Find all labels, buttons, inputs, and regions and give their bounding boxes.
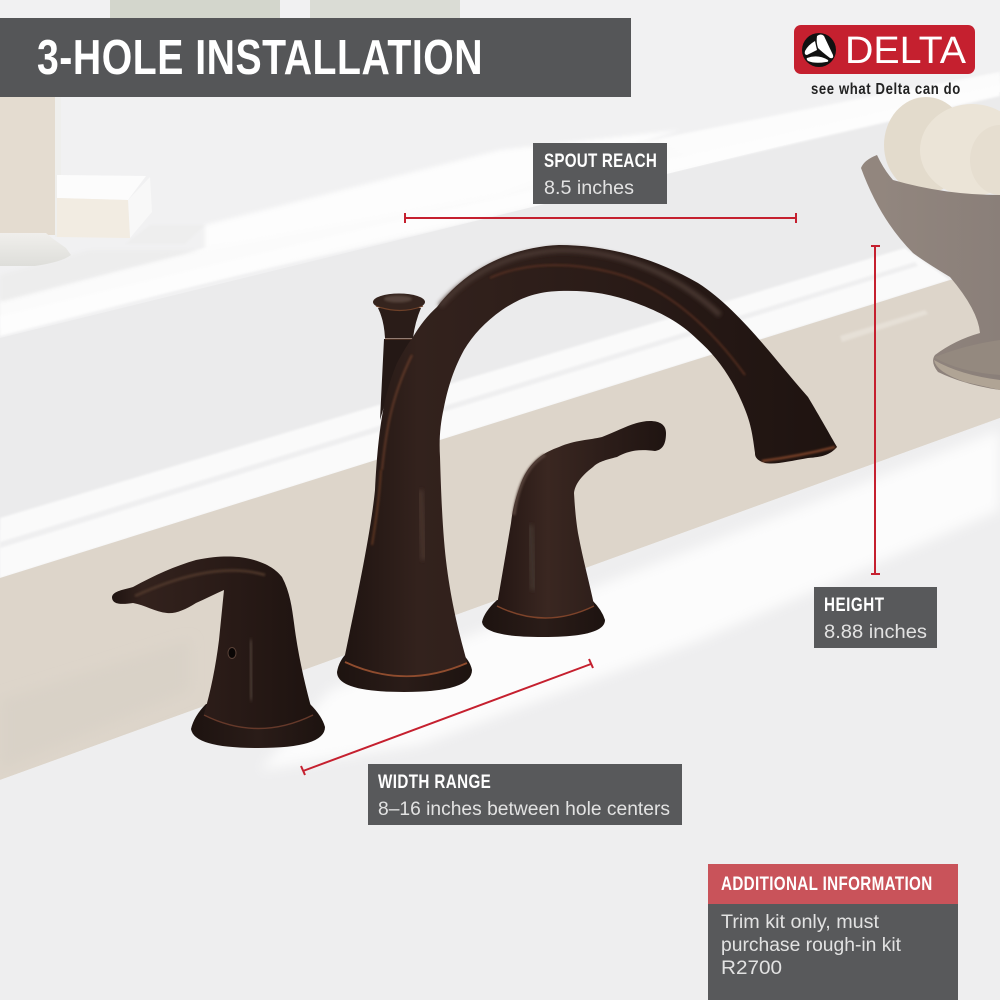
arrow: spout reach dimension line [405, 213, 796, 223]
right handle base [482, 600, 605, 637]
white tub rim foreground [0, 418, 1000, 1000]
callout: width range: 8–16 inches between hole centers [378, 799, 670, 820]
text block: additional information body: purchase rough-in kit [721, 935, 902, 956]
callout: width range [368, 764, 682, 825]
handle hole [228, 648, 236, 658]
faucet [112, 245, 837, 748]
arrow: height dimension line [871, 246, 880, 574]
beige stone deck [0, 272, 1000, 780]
decorative bowl with loofahs [861, 97, 1000, 390]
title banner: 3-HOLE INSTALLATION [37, 31, 483, 85]
callout: height: HEIGHT [824, 593, 884, 615]
callout: width range: WIDTH RANGE [378, 770, 491, 792]
lift rod and knob [373, 294, 425, 420]
window panes [110, 0, 460, 18]
callout: height: 8.88 inches [824, 622, 927, 643]
heading: additional information [708, 864, 958, 904]
tub side panel [0, 92, 1000, 530]
bowl [861, 155, 1000, 390]
callout: spout reach: 8.5 inches [544, 178, 634, 199]
logo: Delta: see what Delta can do [811, 81, 960, 98]
callout: spout reach: SPOUT REACH [544, 149, 657, 171]
heading: additional information: ADDITIONAL INFORMATION [721, 872, 932, 894]
icon: Delta triangle mark [802, 33, 836, 67]
loofahs [884, 97, 1000, 196]
spout [344, 245, 837, 676]
arrow: width range dimension line [301, 659, 593, 775]
spout base [337, 652, 472, 692]
callout: spout reach [533, 143, 667, 204]
text block: additional information body: Trim kit only, must [721, 912, 880, 933]
logo: Delta: DELTA [845, 30, 967, 72]
text block: additional information body: R2700 [721, 958, 782, 979]
title banner [0, 18, 631, 97]
soap bar [57, 175, 152, 238]
left handle base [191, 704, 325, 748]
logo: Delta [794, 25, 975, 98]
panel: additional information [708, 864, 958, 1000]
white moulding strip [0, 248, 950, 578]
left handle [112, 556, 313, 728]
callout: height [814, 587, 937, 648]
jar of bath salts [0, 97, 71, 266]
right handle [497, 421, 666, 618]
